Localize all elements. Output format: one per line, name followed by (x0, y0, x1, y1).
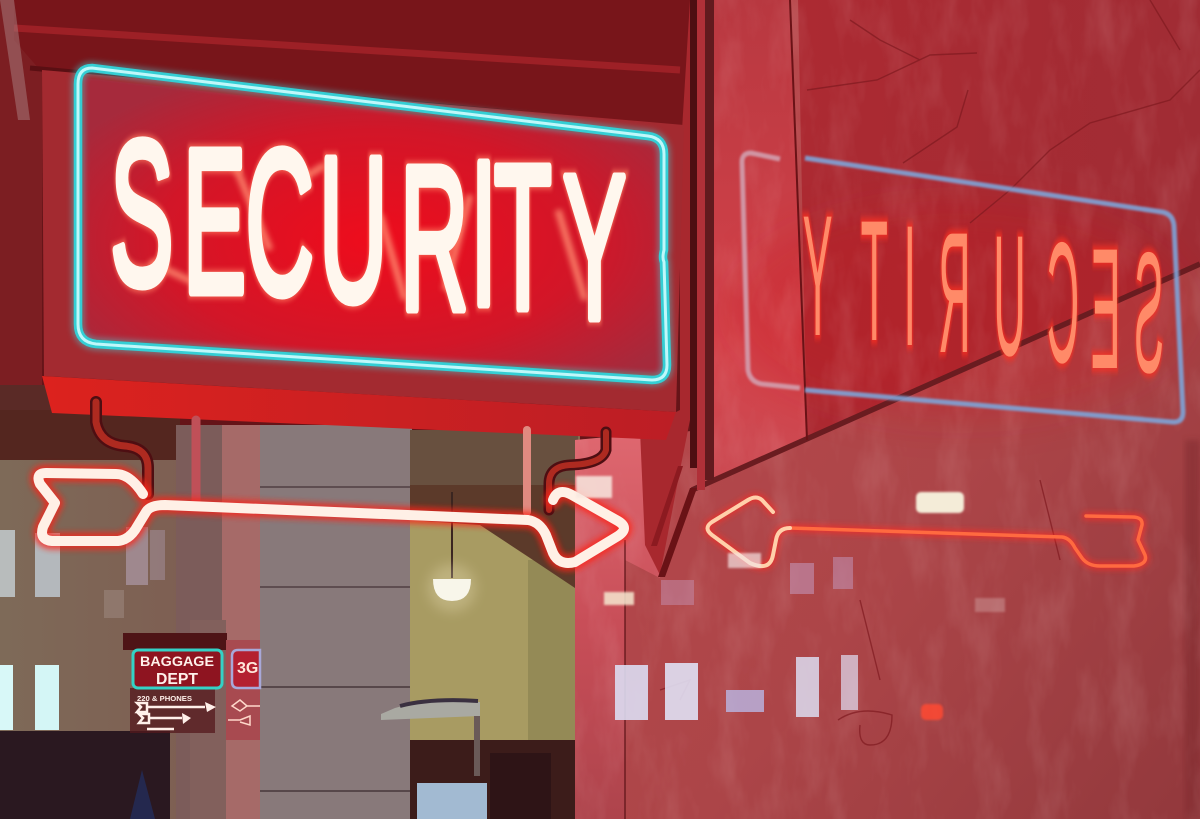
panel: baggage department sign: 220 & PHONES (137, 696, 192, 703)
panel: baggage department sign: DEPT (156, 671, 198, 688)
heading: mirrored SECURITY reflection glow: SECURITY (803, 179, 1164, 409)
icon: small blurred figure lower left (130, 770, 155, 819)
heading: neon SECURITY lettering: SECURITY (110, 99, 626, 362)
panel: baggage department sign (123, 633, 227, 733)
divider: vertical marble seam (790, 0, 807, 440)
background: reflected windows on marble (576, 476, 1005, 720)
divider: dark diagonal mirror edge (692, 264, 1200, 490)
background: upper left dark frame (0, 0, 710, 460)
background: yellow alcove wall (410, 430, 580, 819)
icon: tube connectors glowing behind letters (150, 165, 585, 300)
panel: reflected baggage sign (226, 640, 260, 740)
divider: thin vertical line on lower wall (624, 540, 626, 819)
panel: right marble wall (575, 0, 1200, 819)
icon: support brackets (96, 402, 606, 512)
panel: baggage department sign: BAGGAGE (140, 653, 214, 669)
background: dark lockers lower left (0, 731, 170, 819)
background: lower furniture in alcove (381, 700, 580, 819)
panel: sign box body (42, 70, 684, 412)
heading: neon SECURITY lettering glow: SECURITY (110, 99, 626, 362)
background: grey marble pillar (260, 425, 412, 819)
panel: sign box underside (42, 376, 676, 440)
panel: reflected neon rectangle (742, 153, 1183, 422)
background: lobby left marble wall with windows (0, 410, 262, 819)
panel: dark corner bracket (640, 0, 714, 577)
icon: cyan neon rectangle (78, 68, 667, 380)
heading: mirrored SECURITY reflection: SECURITY (803, 179, 1164, 409)
panel: sign box top cornice (0, 0, 690, 130)
panel: reflected baggage sign: 3G (237, 660, 258, 677)
icon: reflected neon arrow (708, 498, 1146, 566)
icon: pendant lamp (428, 492, 476, 612)
icon: neon arrow (38, 473, 624, 563)
